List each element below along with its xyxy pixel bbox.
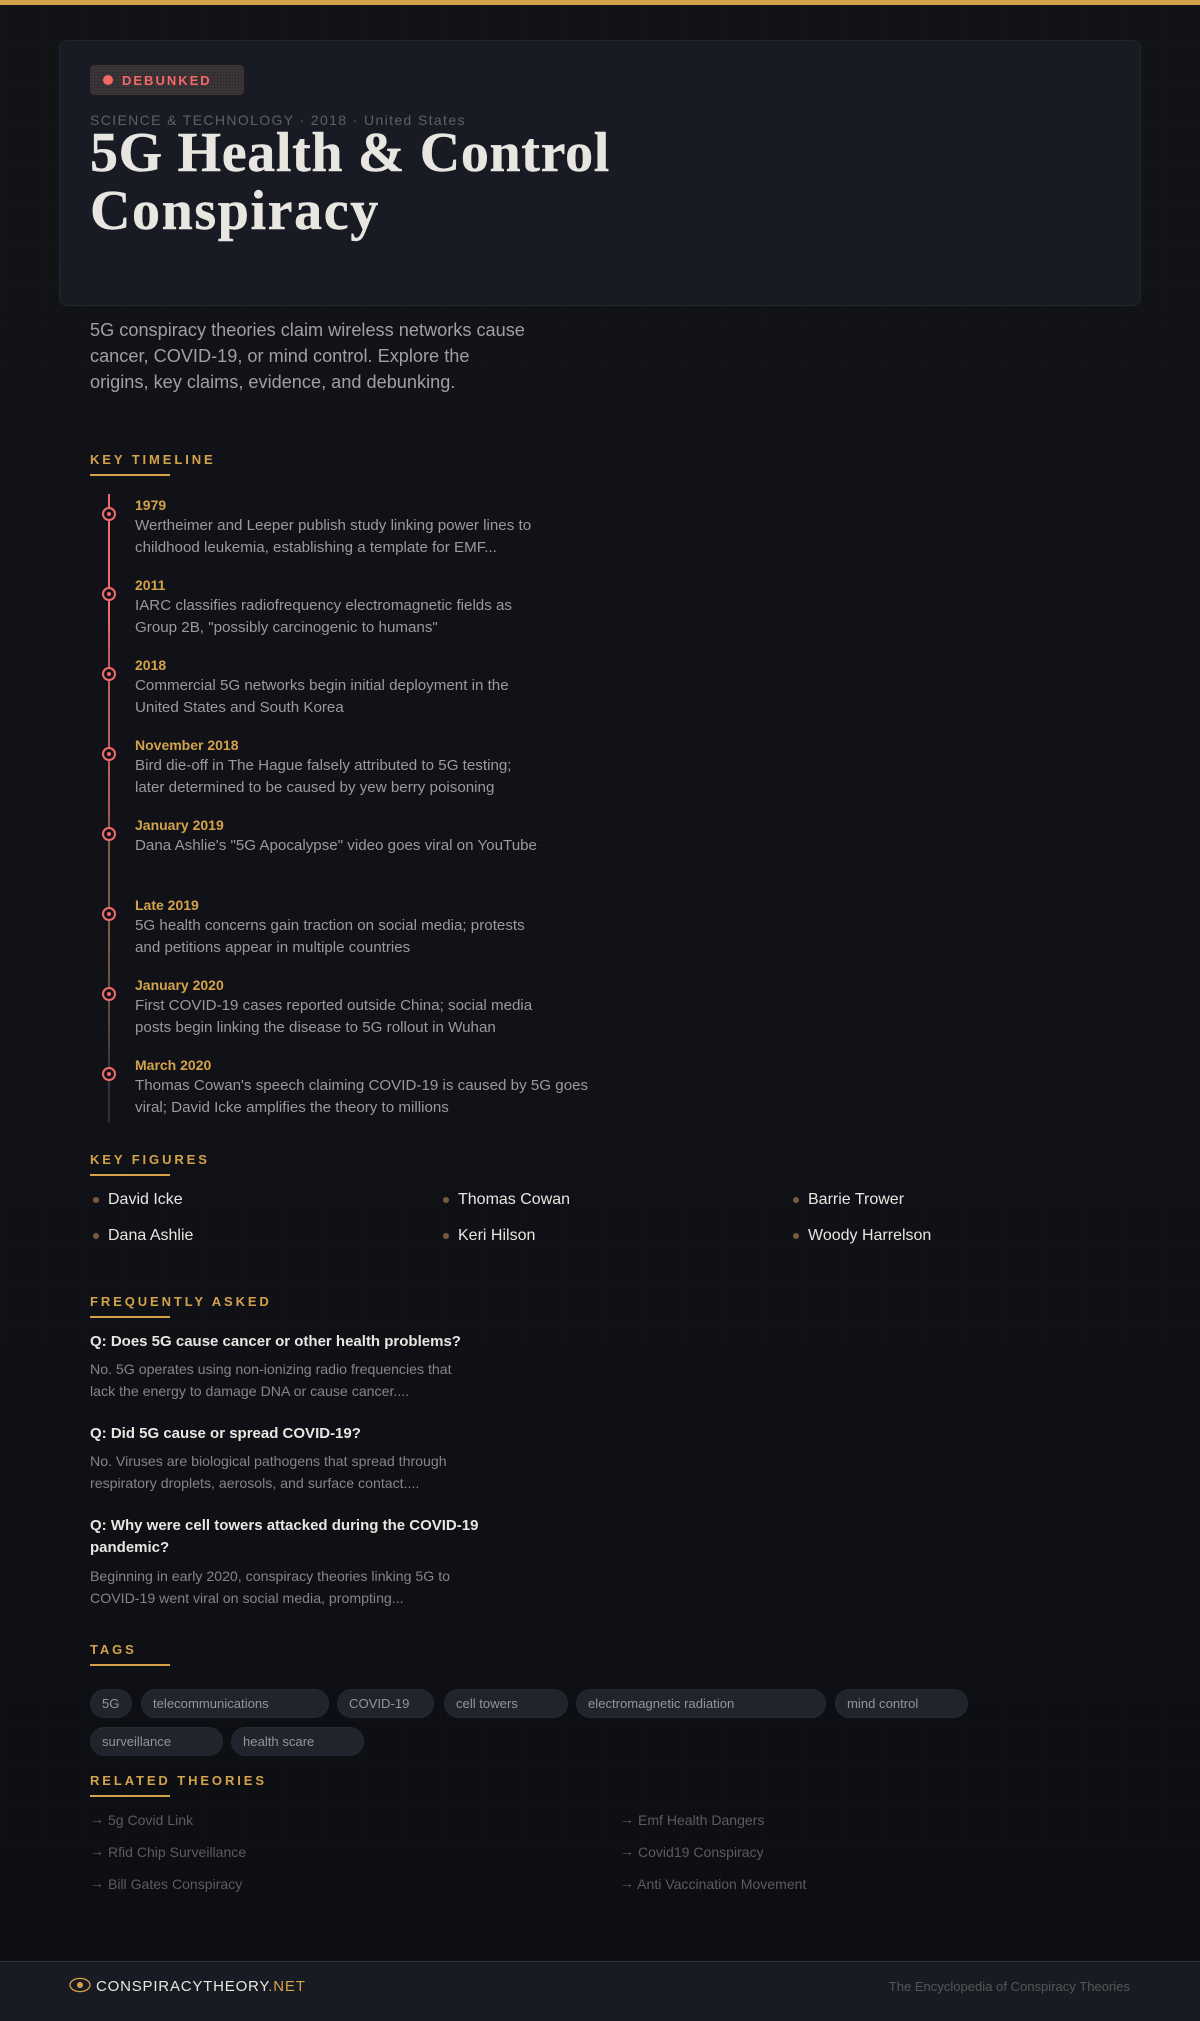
timeline: 2011: [135, 577, 165, 593]
text: electromagnetic radiation: [588, 1696, 734, 1711]
text: No. 5G operates using non-ionizing radio frequencies that: [90, 1361, 452, 1377]
text: health scare: [243, 1734, 314, 1749]
timeline: and petitions appear in multiple countries: [135, 939, 410, 956]
status badge: debunked: [90, 65, 244, 95]
timeline: IARC classifies radiofrequency electromagnetic fields as: [135, 597, 512, 614]
timeline: posts begin linking the disease to 5G rollout in Wuhan: [135, 1019, 496, 1036]
timeline entry: November 2018: [102, 737, 512, 796]
top accent bar: [0, 0, 1200, 5]
timeline: Thomas Cowan's speech claiming COVID-19 is caused by 5G goes: [135, 1077, 588, 1094]
timeline axis: [108, 494, 110, 1123]
panel: hero card: [59, 40, 1141, 306]
related theories links: [90, 1811, 806, 1892]
text: Dana Ashlie: [108, 1227, 193, 1244]
text: telecommunications: [153, 1696, 269, 1711]
icon: eye logo: [69, 1978, 91, 1992]
text: → Covid19 Conspiracy: [620, 1843, 764, 1860]
text: → Bill Gates Conspiracy: [90, 1875, 242, 1892]
intro text: cancer, COVID-19, or mind control. Explore the: [90, 346, 469, 366]
timeline: Group 2B, "possibly carcinogenic to humans": [135, 619, 438, 636]
text: 5G: [102, 1696, 119, 1711]
text: → Anti Vaccination Movement: [620, 1875, 806, 1892]
timeline: United States and South Korea: [135, 699, 344, 716]
badge dot: [103, 75, 113, 85]
intro text: 5G conspiracy theories claim wireless networks cause: [90, 320, 525, 340]
timeline: January 2020: [135, 977, 224, 993]
text: mind control: [847, 1696, 918, 1711]
text: surveillance: [102, 1734, 171, 1749]
heading: related theories: RELATED THEORIES: [90, 1773, 267, 1788]
text: COVID-19 went viral on social media, prompting...: [90, 1590, 404, 1606]
timeline: 2018: [135, 657, 166, 673]
timeline: November 2018: [135, 737, 239, 753]
text: → Rfid Chip Surveillance: [90, 1843, 246, 1860]
timeline entry: January 2020: [102, 977, 532, 1036]
timeline entry: 2011: [102, 577, 512, 636]
text: Q: Did 5G cause or spread COVID-19?: [90, 1425, 361, 1442]
text: Thomas Cowan: [458, 1191, 570, 1208]
timeline: Late 2019: [135, 897, 199, 913]
intro text: origins, key claims, evidence, and debunking.: [90, 372, 455, 392]
text: No. Viruses are biological pathogens that spread through: [90, 1453, 447, 1469]
timeline: Dana Ashlie's "5G Apocalypse" video goes viral on YouTube: [135, 837, 537, 854]
timeline: January 2019: [135, 817, 224, 833]
footer: [0, 1961, 1200, 2021]
timeline: childhood leukemia, establishing a template for EMF...: [135, 539, 497, 556]
timeline: later determined to be caused by yew berry poisoning: [135, 779, 494, 796]
title: Conspiracy: [90, 180, 380, 242]
timeline: Wertheimer and Leeper publish study linking power lines to: [135, 517, 531, 534]
timeline entry: 2018: [102, 657, 509, 716]
text: Beginning in early 2020, conspiracy theories linking 5G to: [90, 1568, 450, 1584]
text: respiratory droplets, aerosols, and surface contact....: [90, 1475, 419, 1491]
footer logo wordmark: CONSPIRACYTHEORY.NET: [96, 1978, 306, 1995]
timeline: 5G health concerns gain traction on social media; protests: [135, 917, 525, 934]
text: COVID-19: [349, 1696, 409, 1711]
FAQ list: [90, 1333, 478, 1606]
timeline: Commercial 5G networks begin initial deployment in the: [135, 677, 509, 694]
text: Barrie Trower: [808, 1191, 904, 1208]
text: Q: Does 5G cause cancer or other health problems?: [90, 1333, 461, 1350]
timeline: March 2020: [135, 1057, 211, 1073]
footer tagline: The Encyclopedia of Conspiracy Theories: [889, 1979, 1130, 1994]
text: Q: Why were cell towers attacked during the COVID-19: [90, 1517, 478, 1534]
timeline: 1979: [135, 497, 166, 513]
text: pandemic?: [90, 1539, 169, 1556]
heading: key timeline: KEY TIMELINE: [90, 452, 216, 467]
timeline: [102, 494, 588, 1123]
key figures list: [93, 1191, 931, 1244]
title: [90, 122, 610, 242]
badge label: DEBUNKED: [122, 73, 212, 88]
heading: tags: TAGS: [90, 1642, 137, 1657]
text: David Icke: [108, 1191, 183, 1208]
heading: key figures: KEY FIGURES: [90, 1152, 210, 1167]
text: cell towers: [456, 1696, 518, 1711]
timeline entry: January 2019: [102, 817, 537, 854]
timeline: First COVID-19 cases reported outside China; social media: [135, 997, 532, 1014]
text: Keri Hilson: [458, 1227, 535, 1244]
text: → 5g Covid Link: [90, 1811, 193, 1828]
timeline: viral; David Icke amplifies the theory to millions: [135, 1099, 449, 1116]
text: → Emf Health Dangers: [620, 1811, 764, 1828]
text: Woody Harrelson: [808, 1227, 931, 1244]
title: 5G Health & Control: [90, 122, 610, 184]
timeline entry: Late 2019: [102, 897, 525, 956]
heading: frequently asked: FREQUENTLY ASKED: [90, 1294, 272, 1309]
category meta line: SCIENCE & TECHNOLOGY · 2018 · United States: [90, 112, 466, 128]
tag pills: [90, 1689, 968, 1756]
timeline entry: March 2020: [102, 1057, 588, 1116]
timeline: Bird die-off in The Hague falsely attributed to 5G testing;: [135, 757, 512, 774]
text: lack the energy to damage DNA or cause cancer....: [90, 1383, 409, 1399]
intro text: [90, 320, 525, 392]
timeline entry: 1979: [102, 497, 531, 556]
